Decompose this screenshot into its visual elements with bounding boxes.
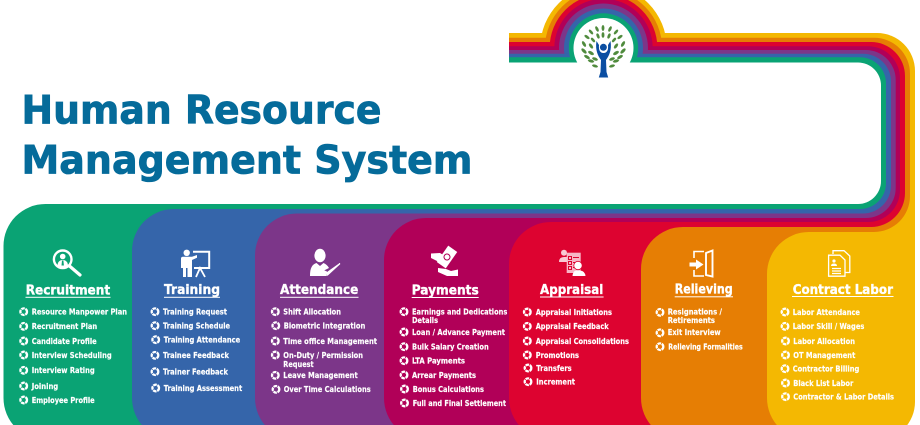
panel: contract labor — [767, 232, 894, 425]
list: relieving items: Resignations / — [668, 308, 722, 316]
icon: trainer at board — [181, 250, 209, 277]
list: training items: Training Assessment — [164, 384, 243, 393]
list: attendance items: Leave Management — [283, 371, 358, 380]
list: payments items: Full and Final Settlement — [413, 399, 506, 408]
list: attendance items: On-Duty / Permission — [283, 351, 363, 360]
list: training items: Training Schedule — [163, 322, 230, 330]
panel: payments — [384, 218, 554, 425]
list: payments items: Earnings and Dedications — [412, 308, 508, 316]
list: appraisal items: Transfers — [536, 364, 572, 373]
heading: appraisal: Appraisal — [540, 283, 603, 298]
list: recruitment items: Joining — [31, 382, 58, 391]
panel: relieving — [641, 227, 812, 425]
icon: hand giving money — [431, 246, 458, 276]
list: recruitment items: Interview Scheduling — [32, 351, 112, 360]
heading: recruitment: Recruitment — [26, 284, 111, 298]
list: payments items — [401, 308, 508, 408]
list: contract labor items: Contractor & Labor Details — [793, 392, 894, 402]
list: training items: Trainee Feedback — [163, 351, 230, 360]
list: payments items: LTA Payments — [412, 356, 465, 366]
heading: relieving: Relieving — [675, 283, 733, 298]
heading: attendance: Attendance — [280, 283, 358, 298]
list: relieving items: Relieving Formalities — [668, 342, 743, 352]
list: training items: Training Request — [163, 308, 227, 316]
list: training items: Trainer Feedback — [163, 368, 229, 376]
panel: recruitment — [4, 204, 177, 425]
list: attendance items: Biometric Integration — [284, 322, 365, 330]
list: recruitment items — [20, 308, 127, 405]
list: recruitment items: Employee Profile — [32, 396, 95, 405]
list: attendance items: Shift Allocation — [283, 308, 341, 316]
title — [22, 88, 472, 184]
list: recruitment items: Interview Rating — [32, 366, 95, 375]
list: appraisal items: Promotions — [536, 351, 579, 360]
list: recruitment items: Recruitment Plan — [32, 322, 97, 331]
panel: training — [132, 209, 300, 425]
title: Human Resource — [22, 88, 382, 134]
icon: appraisal form with person — [559, 250, 586, 276]
list: payments items: Details — [412, 316, 438, 325]
list: payments items: Bonus Calculations — [413, 385, 484, 394]
icon: magnifier with person — [54, 250, 80, 275]
list: contract labor items: Labor Attendance — [793, 308, 860, 317]
list: attendance items: Time office Management — [283, 337, 377, 346]
list: appraisal items — [524, 308, 629, 386]
list: attendance items: Request — [283, 360, 314, 369]
title: Management System — [22, 138, 472, 184]
heading: payments: Payments — [412, 284, 479, 298]
list: appraisal items: Increment — [536, 378, 575, 386]
list: training items: Training Attendance — [164, 336, 240, 344]
list: payments items: Bulk Salary Creation — [412, 342, 489, 352]
list: appraisal items: Appraisal Feedback — [536, 322, 610, 331]
panel: attendance — [255, 214, 429, 425]
icon: tree logo — [581, 25, 626, 78]
list: contract labor items: OT Management — [793, 351, 856, 360]
list: contract labor items: Labor Skill / Wages — [793, 322, 865, 331]
list: contract labor items: Contractor Billing — [793, 364, 859, 374]
icon: person with check — [310, 249, 340, 276]
list: relieving items: Exit Interview — [668, 328, 721, 337]
icon: exit door — [690, 250, 712, 276]
list: attendance items: Over Time Calculations — [284, 385, 371, 394]
list: attendance items — [272, 308, 377, 394]
list: relieving items — [657, 308, 743, 352]
icon: documents — [829, 251, 850, 276]
heading: contract labor: Contract Labor — [793, 283, 893, 298]
list: payments items: Loan / Advance Payment — [412, 328, 505, 337]
list: recruitment items: Resource Manpower Plan — [32, 308, 127, 316]
panel: appraisal — [509, 222, 686, 425]
list: payments items: Arrear Payments — [412, 371, 476, 380]
list: relieving items: Retirements — [668, 316, 715, 325]
heading: training: Training — [164, 283, 220, 298]
list: appraisal items: Appraisal Initiations — [536, 308, 612, 317]
list: contract labor items: Labor Allocation — [793, 337, 855, 346]
list: training items — [152, 308, 243, 393]
list: contract labor items — [782, 308, 894, 402]
list: contract labor items: Black List Labor — [793, 379, 854, 388]
list: appraisal items: Appraisal Consolidations — [536, 337, 629, 346]
list: recruitment items: Candidate Profile — [32, 337, 97, 346]
